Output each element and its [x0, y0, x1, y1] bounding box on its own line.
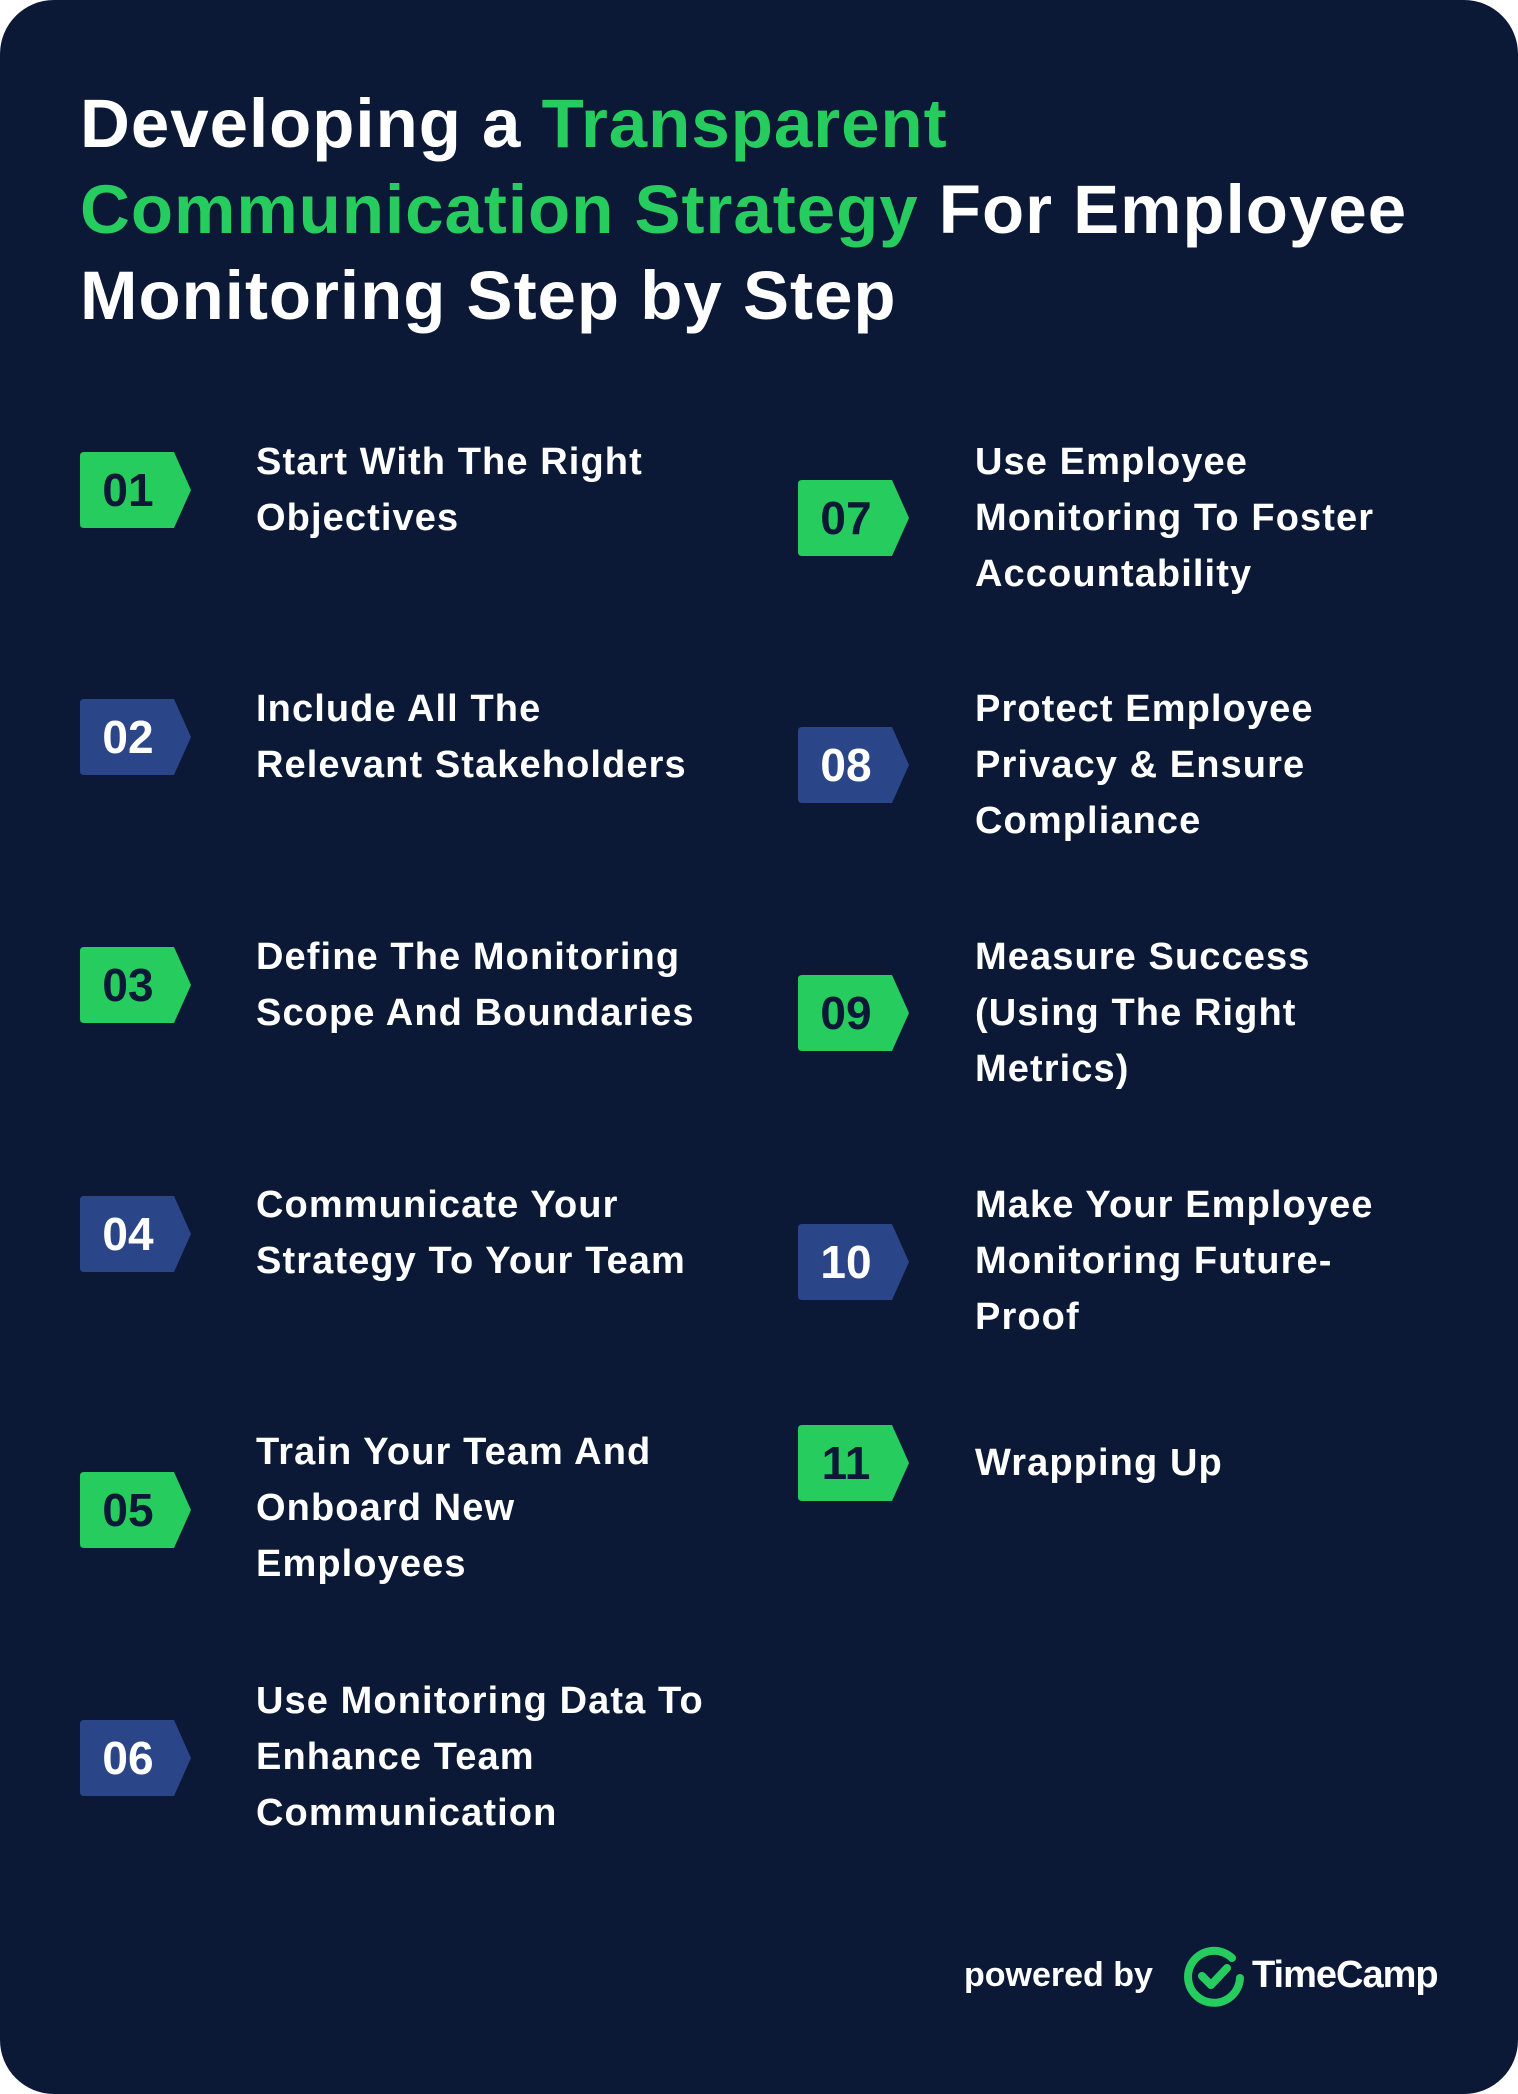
text 03: Scope And Boundaries [256, 992, 695, 1034]
text 03 [256, 936, 695, 1034]
badge 07: 07 [820, 492, 872, 544]
badge 01: 01 [102, 464, 154, 516]
text 02: Include All The [256, 688, 541, 730]
text 02: Relevant Stakeholders [256, 744, 687, 786]
text 01 [256, 441, 643, 539]
text 04: Communicate Your [256, 1184, 618, 1226]
footer: powered by TimeCamp: powered by [964, 1956, 1153, 1994]
title [80, 85, 1407, 334]
badge 06: 06 [102, 1732, 154, 1784]
badge 09 [798, 975, 909, 1051]
text 10: Monitoring Future- [975, 1240, 1332, 1282]
text 03: Define The Monitoring [256, 936, 680, 978]
text 05 [256, 1431, 651, 1585]
text 09: Measure Success [975, 936, 1310, 978]
badge 03: 03 [102, 959, 154, 1011]
badge 02 [80, 699, 191, 775]
badge 03 [80, 947, 191, 1023]
badge 09: 09 [820, 987, 872, 1039]
badge 07 [798, 480, 909, 556]
title: Communication Strategy For Employee [80, 171, 1407, 248]
footer: powered by TimeCamp [964, 1946, 1438, 2007]
badge 11: 11 [822, 1437, 870, 1489]
text 10: Make Your Employee [975, 1184, 1374, 1226]
text 07: Monitoring To Foster [975, 497, 1374, 539]
title: Monitoring Step by Step [80, 257, 896, 334]
text 08: Protect Employee [975, 688, 1314, 730]
text 04 [256, 1184, 686, 1282]
text 04: Strategy To Your Team [256, 1240, 686, 1282]
text 06: Communication [256, 1792, 557, 1834]
text 01: Objectives [256, 497, 459, 539]
text 10 [975, 1184, 1374, 1338]
text 08 [975, 688, 1314, 842]
text 05: Employees [256, 1543, 467, 1585]
badge 05: 05 [102, 1484, 154, 1536]
badge 01 [80, 452, 191, 528]
badge 10 [798, 1224, 909, 1300]
text 09: Metrics) [975, 1048, 1130, 1090]
text 09: (Using The Right [975, 992, 1297, 1034]
title: Developing a Transparent [80, 85, 948, 162]
text 07: Accountability [975, 553, 1252, 595]
text 08: Compliance [975, 800, 1201, 842]
footer: powered by TimeCamp: TimeCamp [1252, 1954, 1438, 1996]
text 06: Enhance Team [256, 1736, 535, 1778]
badge 11 [798, 1425, 909, 1501]
text 06 [256, 1680, 704, 1834]
badge 05 [80, 1472, 191, 1548]
text 07: Use Employee [975, 441, 1248, 483]
badge 04 [80, 1196, 191, 1272]
badge 02: 02 [102, 711, 154, 763]
text 05: Onboard New [256, 1487, 515, 1529]
badge 08 [798, 727, 909, 803]
text 07 [975, 441, 1374, 595]
badge 10: 10 [820, 1236, 872, 1288]
text 01: Start With The Right [256, 441, 643, 483]
text 09 [975, 936, 1310, 1090]
text 11: Wrapping Up [975, 1442, 1223, 1484]
text 10: Proof [975, 1296, 1080, 1338]
text 06: Use Monitoring Data To [256, 1680, 704, 1722]
icon: TimeCamp logo [1184, 1946, 1244, 2007]
text 02 [256, 688, 687, 786]
badge 04: 04 [102, 1208, 154, 1260]
badge 06 [80, 1720, 191, 1796]
badge 08: 08 [820, 739, 872, 791]
text 08: Privacy & Ensure [975, 744, 1305, 786]
text 05: Train Your Team And [256, 1431, 651, 1473]
